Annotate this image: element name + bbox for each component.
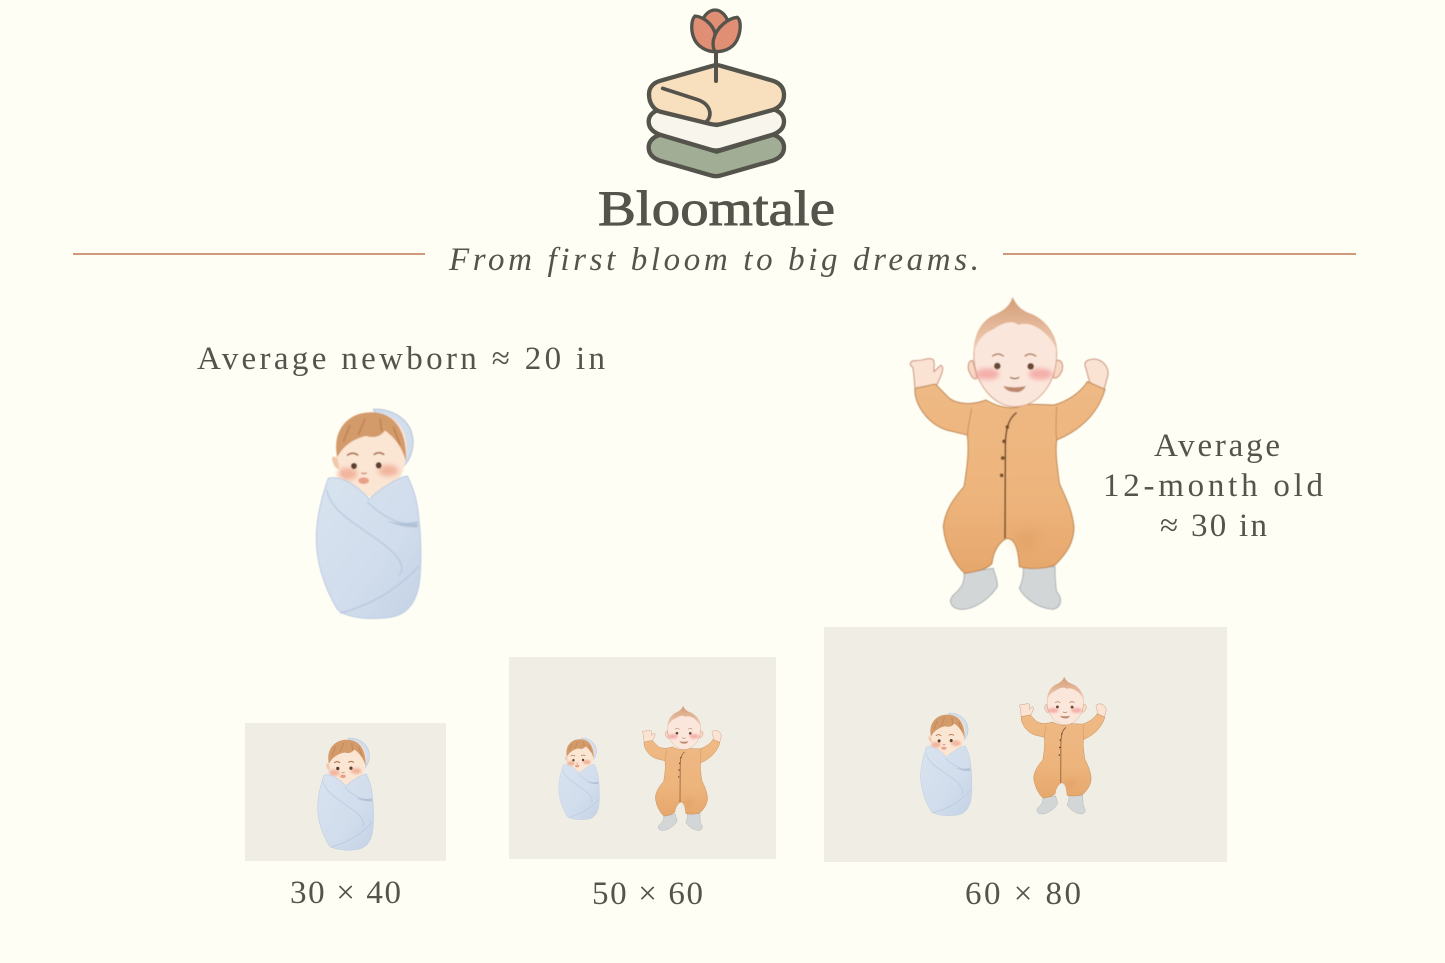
icon: blanket fold [663, 88, 710, 122]
panel: 30 x 40 blanket [245, 723, 446, 861]
swaddled baby in small panel [318, 738, 374, 850]
toddler in large panel [1019, 677, 1106, 814]
size label: 50 x 60: 50 × 60 [592, 876, 703, 912]
tagline: From first bloom to big dreams. [448, 242, 979, 278]
label: newborn size: Average newborn ≈ 20 in [197, 341, 605, 377]
toddler in medium panel [642, 706, 721, 831]
swaddled baby in large panel [921, 713, 972, 816]
label: 12-month size: 12-month old [1103, 468, 1324, 504]
panel: 60 x 80 blanket [824, 627, 1227, 862]
panel: 50 x 60 blanket [509, 657, 776, 859]
swaddled baby in medium panel [559, 738, 599, 820]
divider left [73, 253, 425, 255]
label: 12-month size: ≈ 30 in [1160, 508, 1267, 544]
icon: tulip stem [710, 50, 722, 81]
logo: tulip on folded blankets [649, 10, 784, 176]
icon: cream blanket [649, 109, 784, 150]
divider right [1003, 253, 1356, 255]
brand name: Bloomtale [598, 180, 835, 236]
icon: peach blanket [649, 65, 784, 125]
size label: 60 x 80: 60 × 80 [965, 876, 1081, 912]
label: 12-month size: Average [1154, 428, 1280, 464]
illustration: swaddled newborn [316, 409, 421, 618]
icon: tulip flower [692, 10, 740, 52]
label: 12-month size [1103, 428, 1324, 544]
illustration: 12-month baby [910, 298, 1108, 609]
icon: green blanket [649, 135, 784, 176]
size label: 30 x 40: 30 × 40 [290, 875, 401, 911]
